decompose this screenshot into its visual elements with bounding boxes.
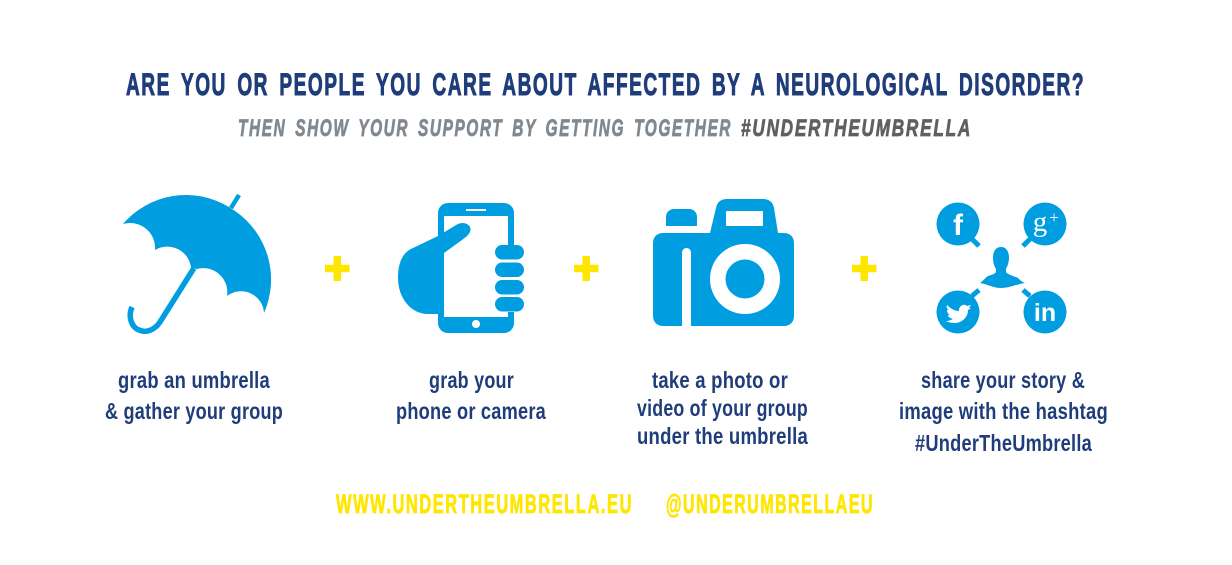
icon: google plus bbox=[1024, 202, 1066, 246]
icon: google plus: g bbox=[1033, 206, 1047, 238]
icon: umbrella bbox=[123, 195, 271, 331]
icon: camera bbox=[653, 199, 794, 326]
step 4 caption: image with the hashtag bbox=[899, 398, 1108, 424]
icon: person bbox=[980, 247, 1025, 288]
step 3 caption: take a photo or bbox=[652, 367, 788, 393]
icon: twitter bbox=[936, 290, 980, 334]
step 1 caption: & gather your group bbox=[105, 398, 283, 424]
footer handle: @UNDERUMBRELLAEU bbox=[666, 489, 874, 519]
icon: google plus: + bbox=[1049, 208, 1059, 227]
icon: social sharing network bbox=[936, 202, 1066, 334]
step 3 caption: under the umbrella bbox=[637, 423, 808, 449]
step 1 caption: grab an umbrella bbox=[118, 367, 270, 393]
subtitle: #UNDERTHEUMBRELLA bbox=[741, 115, 972, 142]
step 2 caption bbox=[396, 367, 546, 424]
step 3 caption bbox=[637, 367, 808, 449]
step 1 caption bbox=[105, 367, 283, 424]
plus sign 1 bbox=[325, 256, 350, 281]
step 2 caption: phone or camera bbox=[396, 398, 546, 424]
step 4 caption: #UnderTheUmbrella bbox=[915, 430, 1092, 456]
icon: facebook: f bbox=[953, 209, 964, 242]
icon: linkedin: in bbox=[1034, 299, 1056, 327]
step 4 caption: share your story & bbox=[921, 367, 1085, 393]
step 2 caption: grab your bbox=[429, 367, 514, 393]
plus sign 2 bbox=[574, 256, 598, 281]
step 4 caption bbox=[899, 367, 1108, 456]
subtitle: THEN SHOW YOUR SUPPORT BY GETTING TOGETHER bbox=[238, 115, 732, 142]
plus sign 3 bbox=[852, 256, 876, 281]
step 3 caption: video of your group bbox=[637, 395, 808, 421]
footer website: WWW.UNDERTHEUMBRELLA.EU bbox=[336, 489, 633, 519]
icon: hand holding phone bbox=[398, 203, 525, 333]
